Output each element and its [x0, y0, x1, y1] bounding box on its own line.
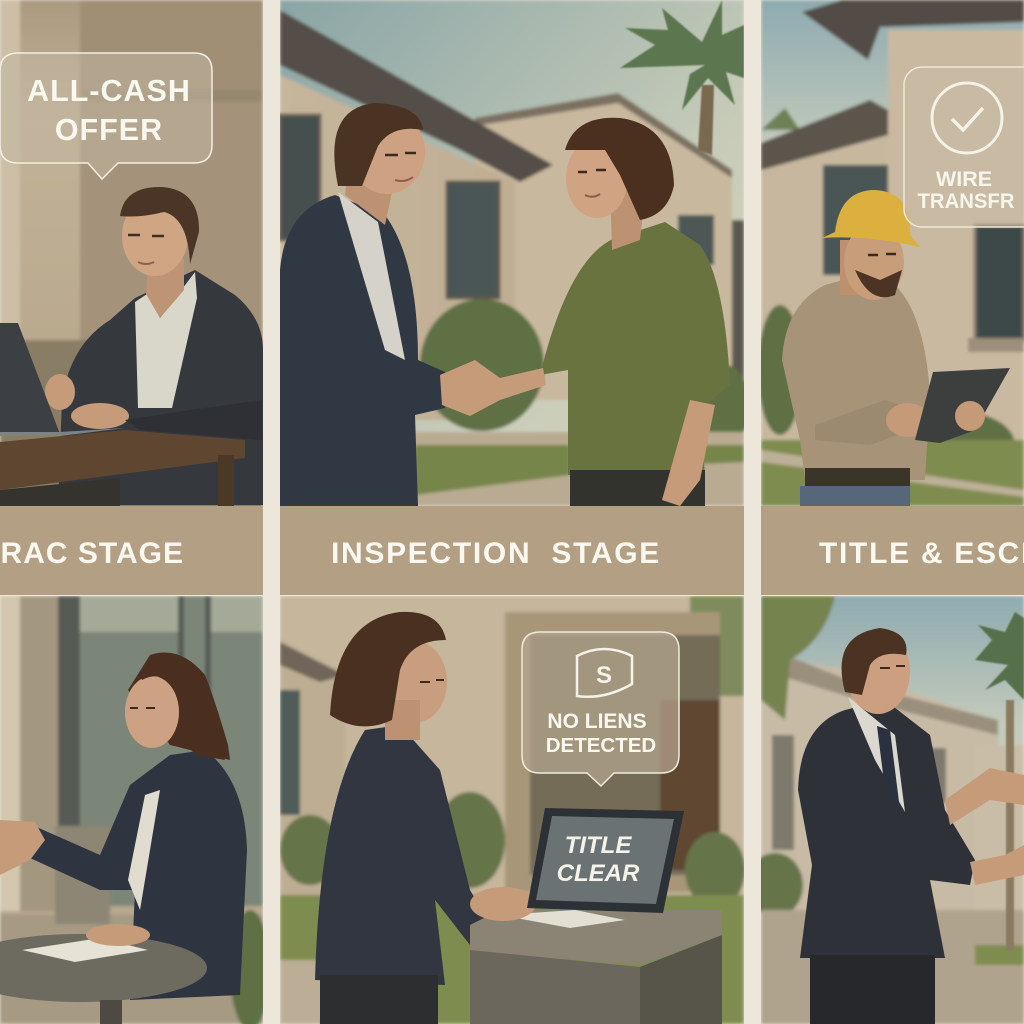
palm tree [975, 612, 1024, 950]
callout: no liens detected [522, 632, 679, 786]
table and laptop [0, 323, 245, 506]
person: woman in dark blazer [315, 612, 490, 1024]
person: worker with hard hat [782, 190, 930, 506]
callout: wire transfer: TRANSFR [918, 190, 1014, 213]
panel: wire transfer scene [758, 0, 1024, 506]
panel: handing over scene [747, 596, 1024, 1024]
person: man at laptop [45, 187, 263, 505]
pedestal [470, 887, 722, 1024]
callout: wire transfer [904, 67, 1024, 227]
icon: yellow hard hat [822, 190, 920, 247]
callout: all-cash offer: OFFER [55, 113, 163, 147]
glass table with document [0, 924, 207, 1024]
tablet: title clear: CLEAR [557, 860, 640, 887]
panel: title clear scene [280, 596, 745, 1024]
person: woman in green shirt [540, 118, 730, 510]
band: stage labels [0, 506, 1024, 595]
palm tree [620, 0, 744, 155]
tablet: title clear [527, 808, 684, 913]
callout: no liens detected: DETECTED [546, 734, 656, 757]
callout: all-cash offer [0, 53, 212, 179]
callout: wire transfer: WIRE [936, 167, 992, 191]
clipboard [915, 368, 1010, 443]
icon: shield with S [577, 649, 632, 697]
icon: shield with S: S [596, 662, 612, 689]
person: man in suit [280, 103, 445, 506]
label: inspection stage: INSPECTION STAGE [331, 537, 661, 570]
panel: inspection handshake scene [280, 0, 750, 510]
handshake [440, 360, 546, 416]
person: man in dark suit [798, 628, 1024, 1024]
tablet: title clear: TITLE [565, 832, 632, 859]
panel: all-cash offer scene [0, 0, 263, 510]
callout: no liens detected: NO LIENS [547, 710, 647, 733]
callout: all-cash offer: ALL-CASH [27, 74, 191, 108]
person: woman in blazer [0, 652, 247, 1000]
panel: woman at glass table [0, 596, 270, 1024]
